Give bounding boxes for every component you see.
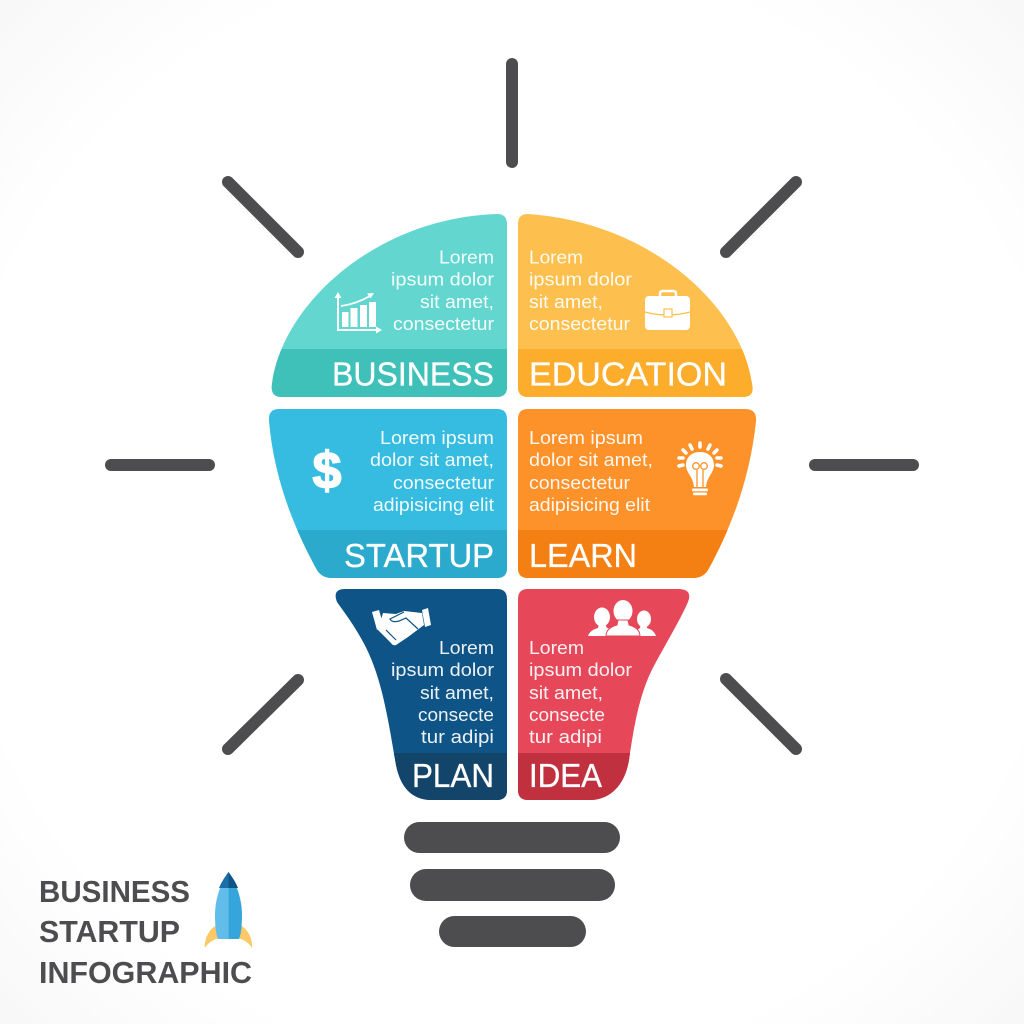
business body text: ipsum dolor	[391, 270, 494, 290]
learn body text	[529, 428, 653, 515]
education body text: ipsum dolor	[529, 270, 632, 290]
panel: education	[515, 205, 760, 400]
panel: business	[272, 214, 507, 397]
idea label: IDEA	[529, 757, 602, 794]
plan label: PLAN	[412, 757, 494, 794]
education body text: consectetur	[529, 314, 630, 334]
plan body text: ipsum dolor	[391, 660, 494, 680]
business body text: consectetur	[393, 314, 494, 334]
business label: BUSINESS	[332, 356, 494, 392]
icon: dollar sign: $	[313, 442, 342, 500]
education body text: sit amet,	[529, 292, 603, 312]
title	[39, 874, 252, 990]
plan body text	[391, 638, 494, 747]
education body text	[529, 248, 632, 334]
panel: plan	[330, 585, 510, 803]
startup body text: Lorem ipsum	[380, 428, 494, 448]
icon: rocket	[205, 872, 252, 948]
panel: idea	[515, 585, 695, 803]
panel: learn	[515, 405, 760, 583]
idea body text: ipsum dolor	[529, 660, 632, 680]
business body text: Lorem	[439, 248, 494, 268]
bulb base bars	[404, 822, 620, 947]
plan body text: sit amet,	[420, 683, 494, 703]
idea body text: Lorem	[529, 638, 584, 658]
title: INFOGRAPHIC	[39, 955, 252, 990]
icon: briefcase	[645, 291, 690, 330]
learn label: LEARN	[529, 537, 637, 574]
startup body text: dolor sit amet,	[370, 450, 494, 470]
idea body text: tur adipi	[529, 727, 602, 747]
learn body text: adipisicing elit	[529, 495, 650, 515]
icon: handshake	[372, 608, 431, 645]
icon: group of people	[588, 600, 656, 636]
startup label: STARTUP	[344, 537, 494, 574]
business body text	[391, 248, 494, 334]
idea body text	[529, 638, 632, 747]
idea body text: sit amet,	[529, 683, 603, 703]
learn body text: Lorem ipsum	[529, 428, 643, 448]
plan body text: Lorem	[439, 638, 494, 658]
panel: startup	[260, 405, 510, 583]
learn body text: consectetur	[529, 473, 630, 493]
startup body text: adipisicing elit	[373, 495, 494, 515]
plan body text: tur adipi	[421, 727, 494, 747]
title: BUSINESS	[39, 874, 190, 909]
idea body text: consecte	[529, 705, 605, 725]
icon: light bulb	[679, 443, 721, 495]
education label: EDUCATION	[529, 356, 727, 392]
startup body text	[370, 428, 494, 515]
education body text: Lorem	[529, 248, 583, 268]
plan body text: consecte	[418, 705, 494, 725]
icon: bar chart	[334, 292, 382, 334]
learn body text: dolor sit amet,	[529, 450, 653, 470]
light rays around the bulb	[111, 64, 913, 749]
title: STARTUP	[39, 914, 180, 949]
business body text: sit amet,	[420, 292, 494, 312]
startup body text: consectetur	[393, 473, 494, 493]
